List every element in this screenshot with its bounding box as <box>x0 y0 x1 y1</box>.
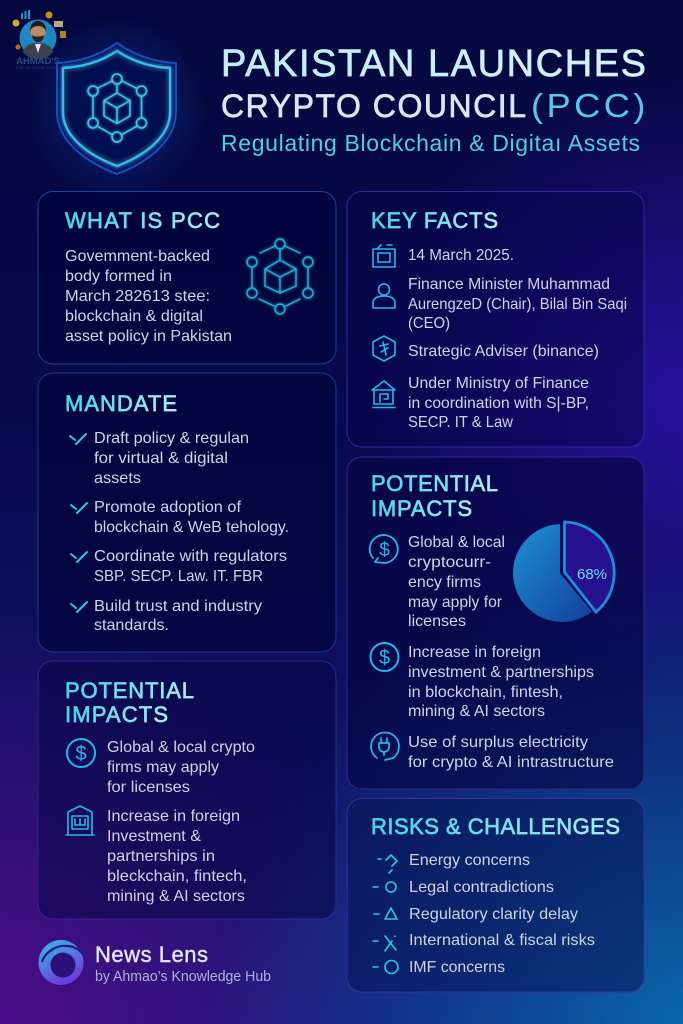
panel: mandate: MANDATE <box>65 391 177 416</box>
panel: potential impacts (right): Use of surplus electricity <box>408 734 588 751</box>
panel: potential impacts (right): Increase in foreign <box>408 644 541 661</box>
icon: dollar refresh: $ <box>379 540 390 561</box>
panel: key facts: (CEO) <box>408 315 450 332</box>
check item: draft policy <box>70 430 249 487</box>
panel: potential impacts (right): mining & AI sectors <box>408 703 545 720</box>
panel: potential impacts (right): Global & local <box>408 534 505 551</box>
panel: potential impacts (right): licenses <box>408 613 466 630</box>
panel: potential impacts (right): POTENTIAL <box>371 471 498 496</box>
panel: key facts <box>347 192 644 447</box>
check item: promote adoption: Promote adoption of <box>94 499 242 516</box>
icon: exchange building <box>66 806 94 835</box>
panel: potential impacts (right): in blockchain, fintesh, <box>408 684 563 701</box>
icon: blockchain cube network <box>247 239 313 314</box>
icon: dollar coin <box>67 739 95 767</box>
panel: potential impacts (right) <box>347 457 644 789</box>
icon: person <box>373 284 395 308</box>
panel: what is PCC: March 282613 stee: <box>65 288 210 305</box>
check item: build trust: standards. <box>94 617 169 634</box>
logo: Ahmad's Knowledge Hub <box>12 10 66 70</box>
risk: IMF concerns: IMF concerns <box>409 959 505 976</box>
footer: News Lens brand: News Lens <box>95 942 208 967</box>
icon: dollar coin <box>370 643 398 671</box>
panel: potential impacts (right): cryptocurr- <box>408 554 491 571</box>
risk: energy concerns: Energy concerns <box>409 852 530 869</box>
check item: draft policy: for virtual & digital <box>94 450 228 467</box>
icon: dollar coin: $ <box>75 743 87 765</box>
icon: dollar coin: $ <box>379 647 390 669</box>
icon: ministry house <box>372 381 395 408</box>
panel: key facts: Strategic Adviser (binance) <box>408 343 599 360</box>
risk: regulatory clarity delay: Regulatory clarity delay <box>409 906 578 923</box>
pie chart: 68%: 68% <box>577 566 607 583</box>
panel: potential impacts (left): partnerships in <box>107 848 215 865</box>
icon: swirl logo <box>38 940 84 985</box>
title block: Regulating Blockchain & Digitaı Assets <box>221 130 640 156</box>
panel: potential impacts (left): bleckchain, fintech, <box>107 868 247 885</box>
check item: coordinate <box>71 548 287 585</box>
panel: potential impacts (right): may apply for <box>408 594 503 611</box>
footer: News Lens brand <box>38 940 271 985</box>
panel: potential impacts (left): IMPACTS <box>65 702 168 727</box>
check item: draft policy: assets <box>94 470 141 487</box>
panel: what is PCC: Govemment-backed <box>65 248 210 265</box>
panel: key facts: in coordination with S|-BP, <box>408 395 589 412</box>
panel: mandate <box>38 373 336 652</box>
panel: what is PCC: WHAT IS PCC <box>65 208 220 233</box>
icon: dollar refresh <box>370 535 398 563</box>
panel: potential impacts (right): IMPACTS <box>371 496 472 521</box>
panel: what is PCC <box>38 192 336 364</box>
footer: News Lens brand: by Ahmao’s Knowledge Hub <box>95 969 271 985</box>
icon: calendar <box>373 245 395 267</box>
risk: international and fiscal: International & fiscal risks <box>409 932 595 949</box>
check item: build trust <box>71 598 262 634</box>
logo: Ahmad's Knowledge Hub: AHMAD'S <box>16 56 60 66</box>
panel: potential impacts (left): mining & AI sectors <box>107 888 245 905</box>
risk: energy concerns <box>378 852 530 873</box>
pie chart: 68% <box>513 522 614 622</box>
panel: potential impacts (right): investment & partnerships <box>408 664 594 681</box>
panel: potential impacts (right): for crypto & AI intrastructure <box>408 754 614 771</box>
risk: legal contradictions: Legal contradictions <box>409 879 554 896</box>
title block: (PCC) <box>531 88 645 125</box>
title block: CRYPTO COUNCIL <box>221 88 526 124</box>
panel: what is PCC: blockchain & digital <box>65 308 203 325</box>
panel: potential impacts (left): Global & local crypto <box>107 739 255 756</box>
panel: key facts: Under Ministry of Finance <box>408 375 589 392</box>
check item: draft policy: Draft policy & regulan <box>94 430 249 447</box>
panel: risks and challenges: RISKS & CHALLENGES <box>371 814 620 839</box>
panel: what is PCC: asset policy in Pakistan <box>65 328 232 345</box>
panel: risks and challenges <box>347 798 644 992</box>
logo: Ahmad's Knowledge Hub: KNOWLEDGE HUB <box>16 65 56 70</box>
panel: key facts: KEY FACTS <box>371 208 498 233</box>
title block <box>221 43 646 156</box>
icon: surplus electricity plug <box>371 733 399 760</box>
panel: potential impacts (left): firms may apply <box>107 759 219 776</box>
icon: hexagon adviser <box>373 336 395 361</box>
check item: coordinate: Coordinate with regulators <box>94 548 287 565</box>
panel: potential impacts (left): Investment & <box>107 828 201 845</box>
check item: build trust: Build trust and industry <box>94 598 262 615</box>
panel: what is PCC: body formed in <box>65 268 172 285</box>
panel: potential impacts (left): for licenses <box>107 779 190 796</box>
panel: key facts: SECP. IT & Law <box>408 414 513 431</box>
panel: key facts: Finance Minister Muhammad <box>408 276 610 293</box>
panel: potential impacts (left) <box>38 661 336 919</box>
check item: promote adoption: blockchain & WeB tehology. <box>94 519 289 536</box>
icon: glowing shield with blockchain cube <box>27 16 207 200</box>
check item: coordinate: SBP. SECP. Law. IT. FBR <box>94 568 263 585</box>
panel: key facts: 14 March 2025. <box>408 247 514 264</box>
check item: promote adoption <box>71 499 289 536</box>
panel: potential impacts (left): POTENTIAL <box>65 678 194 703</box>
panel: key facts: AurengzeD (Chair), Bilal Bin Saqi <box>408 296 627 313</box>
title block: PAKISTAN LAUNCHES <box>221 43 646 85</box>
panel: potential impacts (right): ency firms <box>408 574 481 591</box>
panel: potential impacts (left): Increase in foreign <box>107 808 240 825</box>
